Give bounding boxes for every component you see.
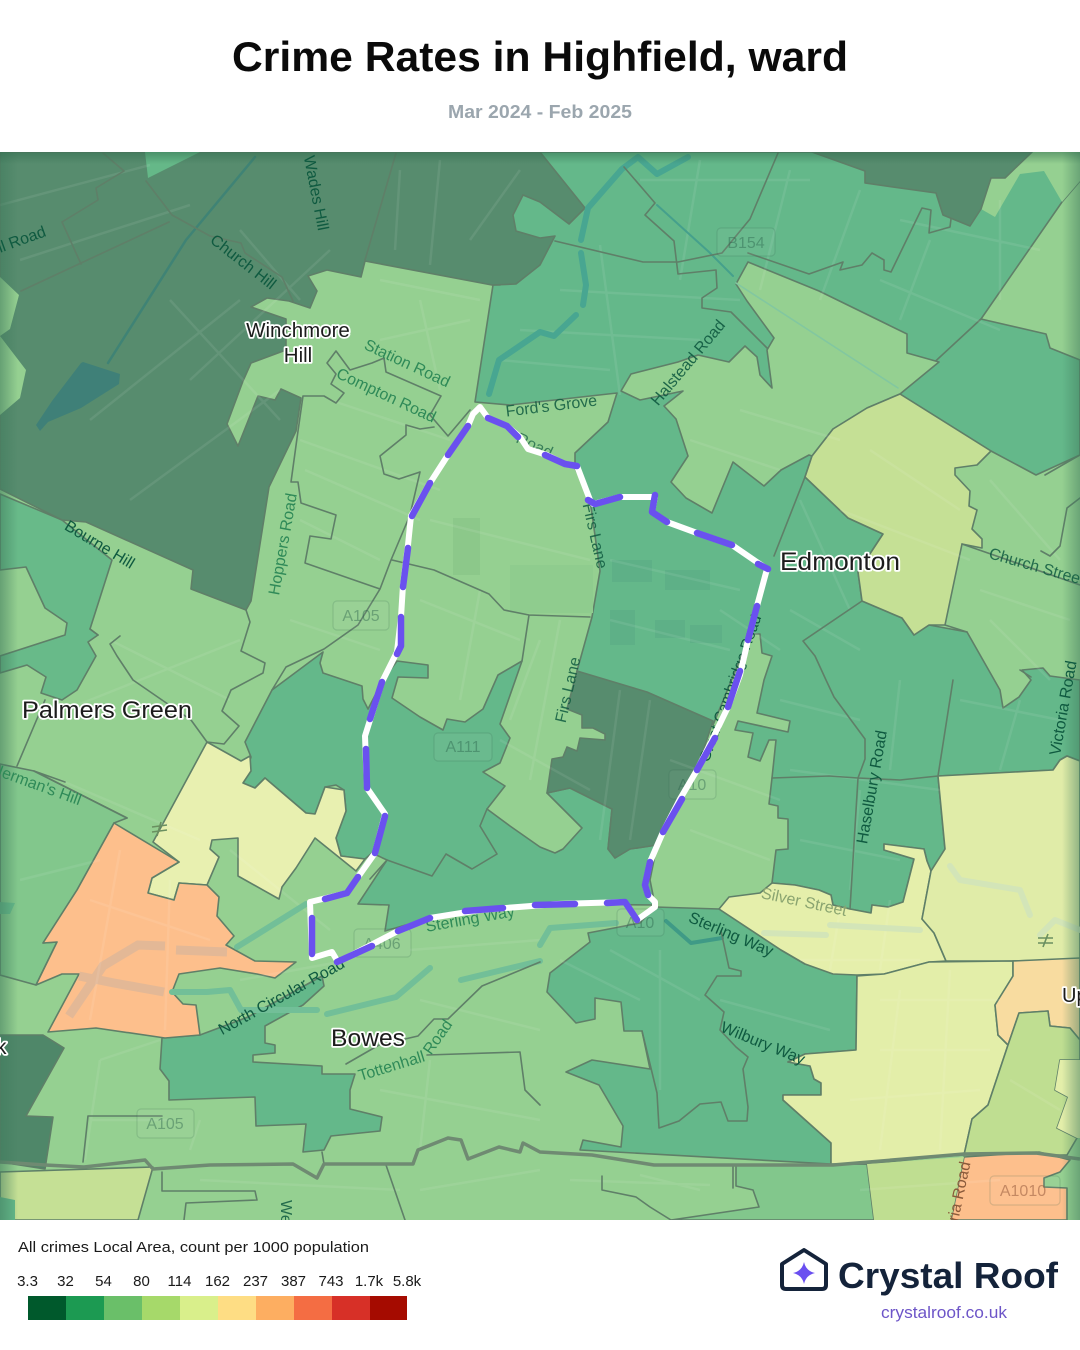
street labels: Haselbury Road [854, 729, 891, 845]
road shields: A1010 [1000, 1183, 1046, 1200]
street labels: Road [513, 430, 555, 462]
place labels: Hill [284, 344, 312, 367]
street labels: Firs Lane [553, 655, 584, 724]
street labels: Halstead Road [648, 317, 729, 409]
legend title: All crimes Local Area, count per 1000 population [18, 1239, 369, 1256]
place labels: Bowes [331, 1025, 405, 1052]
place labels: Edmonton [780, 548, 900, 576]
street labels: Sterling Way [686, 909, 776, 960]
street labels: We [277, 1200, 294, 1224]
region: bottom yellow-green [867, 1157, 964, 1220]
street labels: Hoppers Road [266, 492, 301, 596]
icon: rail symbols [152, 822, 1053, 947]
region: north-east dark [812, 152, 1032, 226]
street labels: Compton Road [334, 365, 438, 426]
title: Crime Rates in Highfield, ward [232, 33, 848, 80]
street labels: Wilbury Way [718, 1019, 807, 1068]
region: Edmonton yellow-green [805, 394, 991, 635]
ward outline: white base [310, 407, 767, 962]
street labels: Firs Lane [579, 502, 610, 570]
region: dark north-west [0, 152, 585, 610]
region: north-east mid green [900, 319, 1080, 475]
road shields: A105 [342, 608, 380, 625]
subtitle: date range: Mar 2024 - Feb 2025 [448, 102, 632, 122]
place labels: Winchmore [246, 319, 350, 342]
region: north and east mid green [475, 152, 1080, 913]
vignette [0, 152, 1080, 1220]
decor: streets [0, 160, 1070, 1190]
region: Silver Street pale yellow [719, 844, 946, 975]
ward outline: purple dashes [312, 418, 768, 962]
legend values: 114 [168, 1273, 191, 1290]
street labels: Road [420, 1017, 456, 1058]
logo url: crystalroof.co.uk [881, 1304, 1008, 1322]
legend values: 5.8k [393, 1273, 422, 1290]
legend values: 32 [57, 1273, 74, 1290]
street labels: Great Cambridge Road [696, 613, 765, 764]
legend [17, 1239, 422, 1320]
place labels [0, 319, 1080, 1059]
region: south-west mid green [160, 976, 382, 1152]
lake [36, 362, 120, 431]
decor: road inside orange area [69, 945, 227, 1016]
decor: park and block texture [453, 518, 593, 613]
region: south mid green [547, 907, 857, 1164]
region: bottom-left mid corner [0, 1197, 15, 1220]
decor: rivers and streams [108, 157, 1080, 1014]
legend values: 387 [281, 1273, 306, 1290]
road shields: B154 [727, 235, 765, 252]
region: west pale yellow [148, 742, 365, 900]
street labels: Tottenhall [356, 1049, 427, 1085]
region: small left mid patches [0, 902, 15, 914]
road shields: A10 [626, 915, 654, 932]
icon: house with star [782, 1250, 826, 1289]
region: Palmers Green orange [36, 823, 296, 1038]
street labels: Station Road [361, 337, 452, 391]
decor: boundary lines [17, 153, 1080, 1220]
road shields: A111 [446, 739, 481, 756]
street labels: Bourne Hill [61, 518, 137, 573]
ward boundary: Highfield [310, 407, 768, 962]
region: top-right light sliver [981, 152, 1080, 217]
region: ward south-west mid green [243, 652, 657, 931]
decor: county border [0, 1138, 1080, 1178]
road shields: A105 [146, 1116, 184, 1133]
legend values: 237 [243, 1273, 268, 1290]
region: east yellow-green [964, 1011, 1080, 1155]
region: east pale yellow park [922, 756, 1080, 961]
road shields: A406 [363, 936, 401, 953]
street labels: Sterling Way [424, 903, 516, 936]
region: north-east light green [621, 262, 939, 513]
region: bottom-right orange [951, 1152, 1070, 1220]
legend values: 1.7k [355, 1273, 384, 1290]
region: ward dark block [547, 671, 713, 858]
region: bottom-left yellow-green [0, 1167, 153, 1220]
region: east pale patch [1055, 1060, 1080, 1138]
region: bottom-left dark [0, 1035, 64, 1169]
region: far-left medium green [0, 764, 127, 985]
region: left mid green [0, 494, 112, 700]
legend values: 162 [205, 1273, 230, 1290]
legend values [17, 1273, 422, 1290]
road shields: A10 [678, 777, 706, 794]
street labels: North Circular Road [216, 955, 348, 1039]
logo wordmark: Crystal Roof [838, 1255, 1059, 1296]
logo: Crystal Roof [782, 1250, 1059, 1322]
street labels: Wades Hill [300, 154, 331, 232]
place labels: Palmers Green [22, 697, 192, 724]
legend colour scale [28, 1296, 407, 1320]
street labels: Ford's Grove [505, 392, 598, 421]
panel: choropleth map [0, 152, 1080, 1224]
region: bottom medium green [671, 1164, 874, 1220]
region: east peach [995, 958, 1080, 1045]
street labels: ria Road [945, 1160, 974, 1223]
street labels [0, 154, 1080, 1224]
region: left light patches [0, 277, 26, 415]
legend values: 80 [133, 1273, 150, 1290]
street labels: Church Hill [207, 232, 279, 293]
legend values: 3.3 [17, 1273, 38, 1290]
street labels: Victoria Road [1047, 659, 1080, 757]
legend values: 54 [95, 1273, 112, 1290]
legend values: 743 [318, 1273, 344, 1290]
road shields [137, 228, 1060, 1205]
region: south pale yellow [783, 961, 1013, 1164]
street labels: Silver Street [760, 885, 849, 920]
region: top mid triangle [145, 152, 200, 178]
